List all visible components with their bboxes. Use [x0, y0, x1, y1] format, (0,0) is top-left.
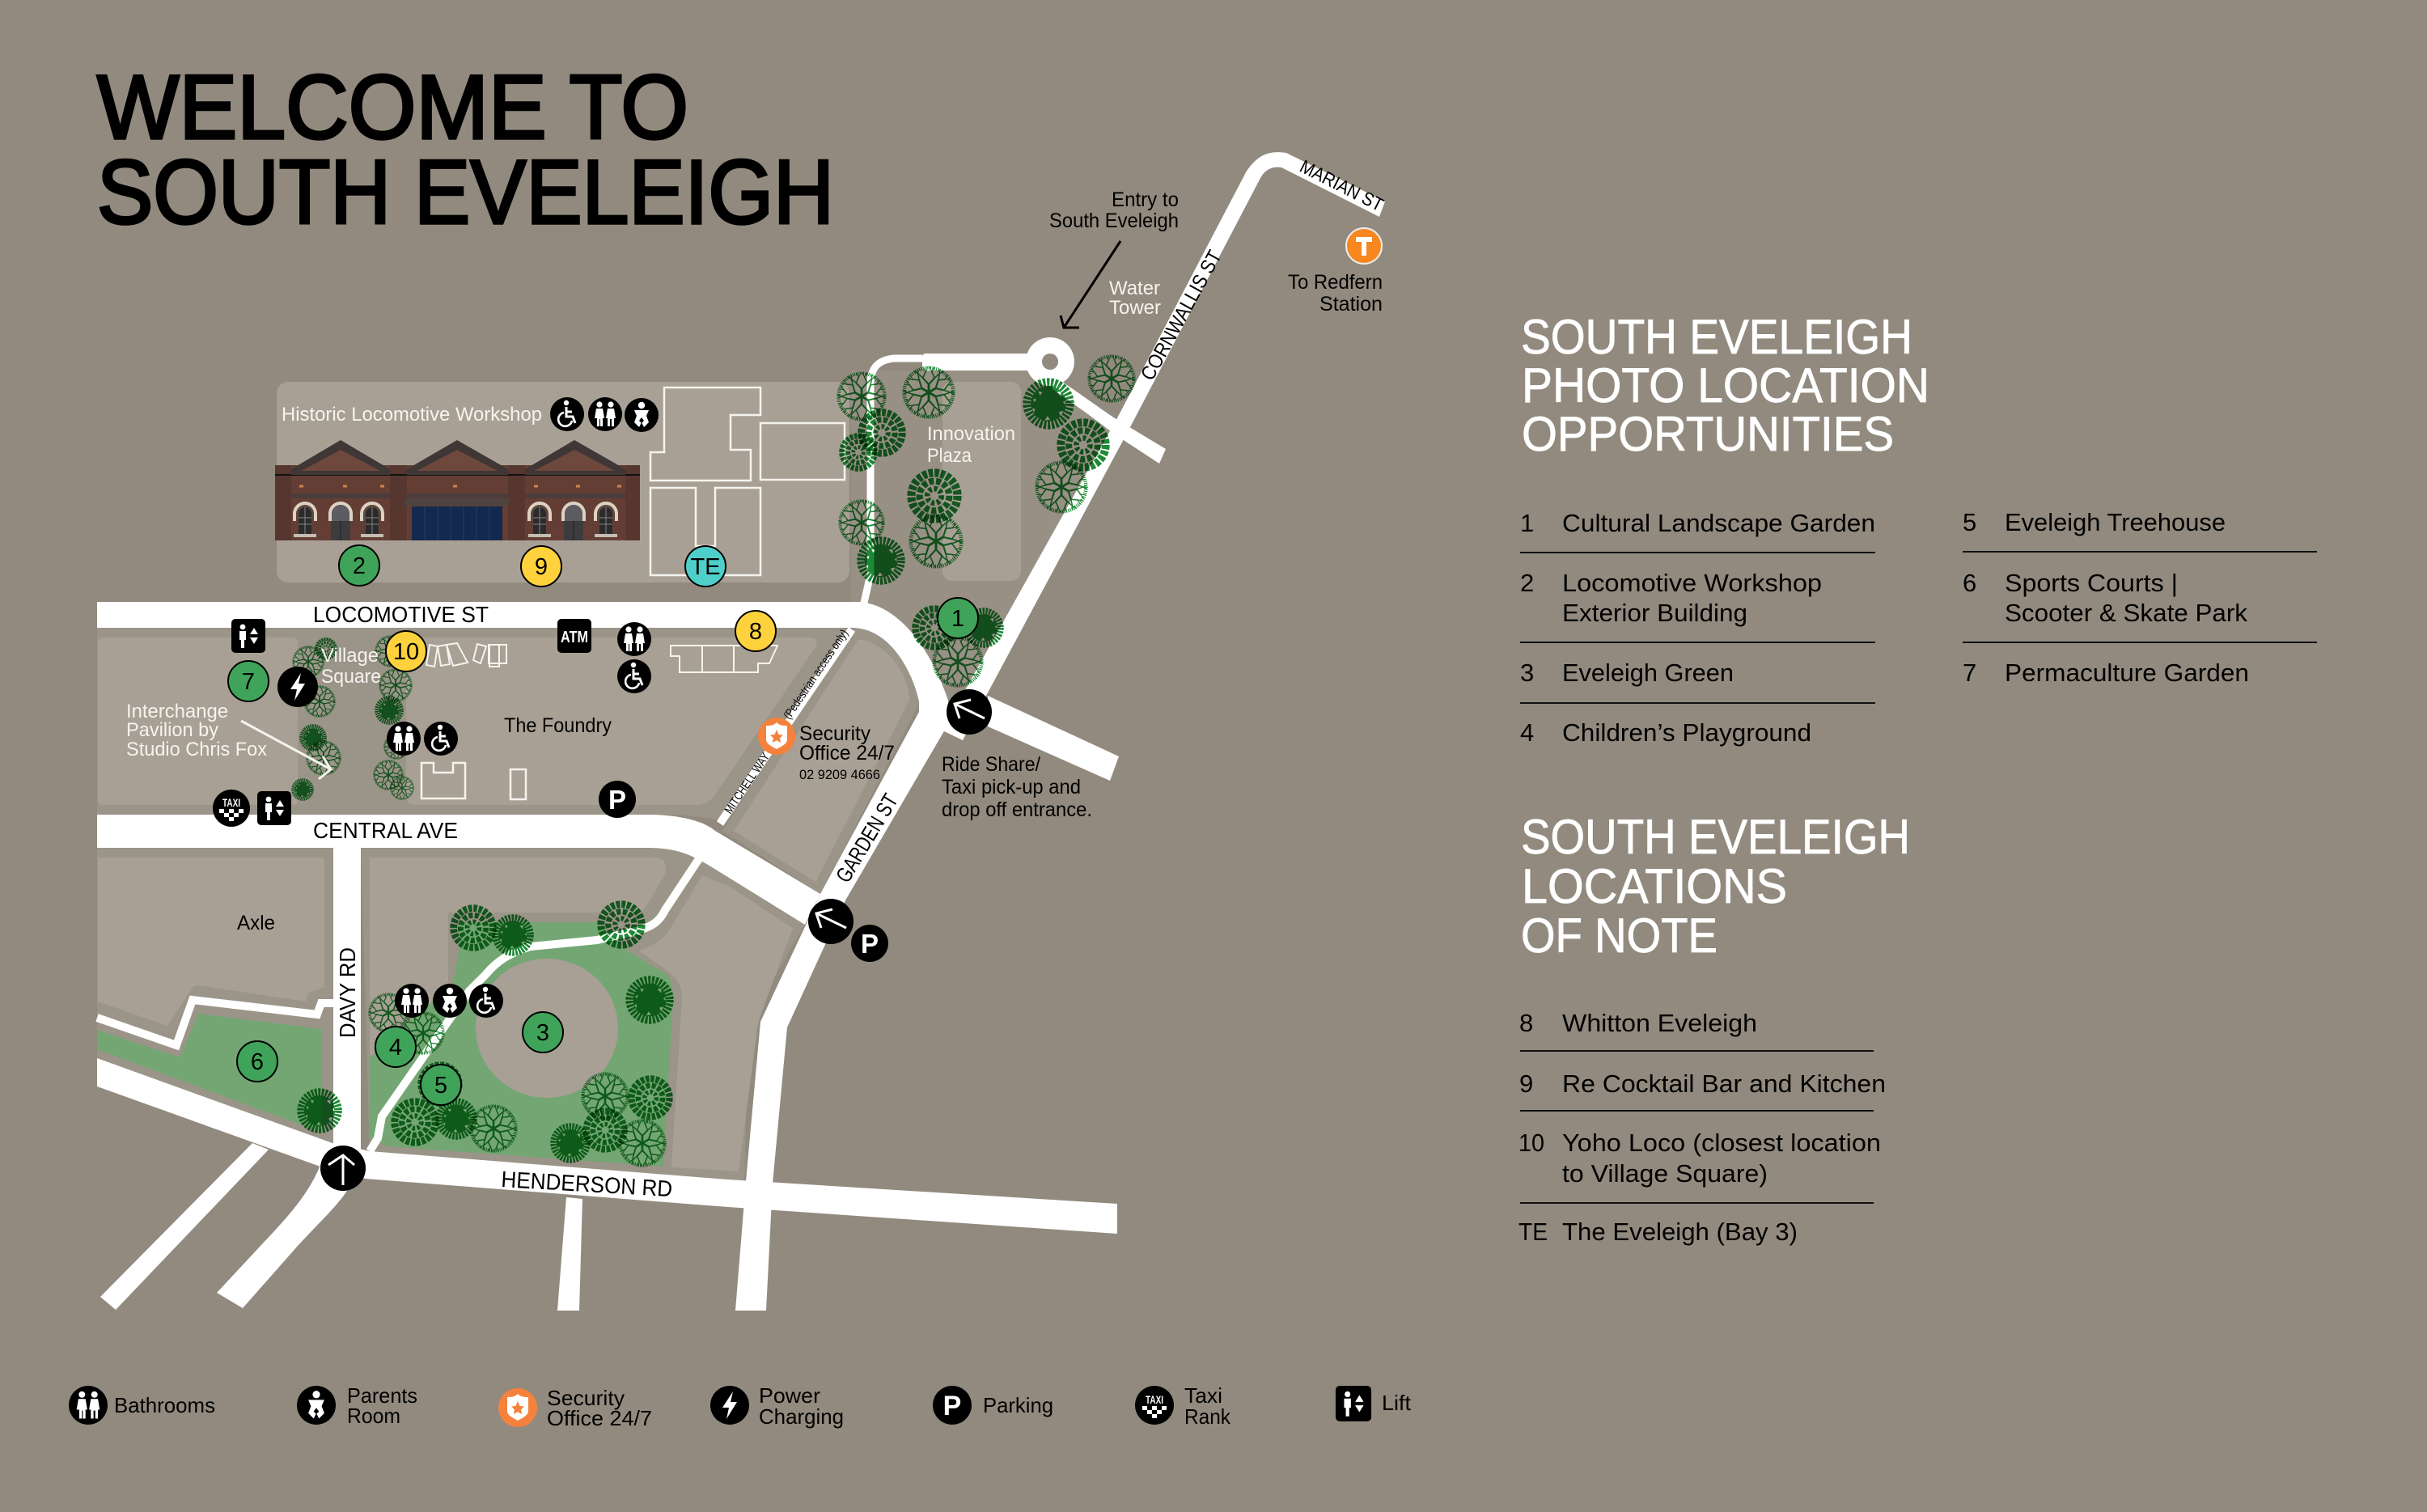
legend: parents room: Room [347, 1404, 400, 1428]
trees: Eveleigh Green [301, 904, 670, 1166]
legend: security office [498, 1386, 652, 1430]
legend: power charging [710, 1383, 844, 1429]
place names: Village [321, 645, 379, 667]
heading: photo locations: PHOTO LOCATION [1522, 358, 1929, 413]
list: locations of note: TE [1518, 1218, 1548, 1246]
facility icons: Village Square and Central Ave: P [608, 785, 626, 815]
arrow: interchange pavilion [241, 721, 331, 779]
light building blocks [98, 382, 1021, 1171]
numbered location pins: TE [690, 554, 721, 580]
place names: Plaza [927, 445, 972, 467]
numbered location pins: 1 [951, 606, 964, 632]
place names: South Eveleigh [1049, 210, 1179, 232]
train station icon [1346, 228, 1382, 264]
legend: power charging: Charging [759, 1404, 844, 1429]
place names: Historic Locomotive Workshop [282, 404, 542, 426]
arrow: entry to South Eveleigh [1061, 241, 1120, 328]
facility icons: Eveleigh Green [395, 984, 503, 1018]
workshop building illustration [275, 440, 640, 540]
facility icons: workshop [550, 397, 659, 432]
legend: security office: Office 24/7 [547, 1406, 652, 1430]
list: photo locations right column: Scooter & Skate Park [2005, 599, 2247, 627]
entry arrows and parking: P [861, 929, 879, 959]
place names: 02 9209 4666 [799, 767, 880, 782]
oval lawn [476, 959, 618, 1098]
place names: Taxi pick-up and [942, 776, 1081, 798]
place names: Interchange [126, 701, 228, 722]
list: photo locations right column: 6 [1963, 569, 1976, 597]
place names: Axle [237, 912, 275, 934]
place names: Pavilion by [126, 719, 218, 741]
legend: parents room: Parents [347, 1383, 417, 1408]
street names: CORNWALLIS ST [1137, 247, 1226, 384]
place names: Station [1319, 293, 1383, 316]
list: photo locations left column: 4 [1520, 718, 1534, 747]
legend: taxi rank: Taxi [1184, 1383, 1222, 1408]
street names: MARIAN ST [1297, 155, 1387, 215]
list: locations of note: 8 [1519, 1009, 1533, 1037]
list: photo locations left column: Eveleigh Green [1562, 659, 1734, 687]
heading: locations of note: SOUTH EVELEIGH [1521, 810, 1910, 864]
list: photo locations left column: Children’s Playground [1562, 718, 1811, 747]
heading: locations of note [1521, 810, 1910, 963]
legend: taxi rank [1135, 1383, 1231, 1429]
numbered location pins [228, 545, 978, 1105]
legend: bathrooms [69, 1386, 215, 1425]
list: photo locations left column: Cultural Landscape Garden [1562, 509, 1875, 537]
street names: MITCHELL WAY [722, 751, 773, 816]
legend: parking: P [943, 1391, 961, 1421]
legend: power charging: Power [759, 1383, 820, 1408]
facility icons: Village Square and Central Ave: TAXI [222, 796, 240, 809]
entry arrows and parking [320, 689, 992, 1191]
heading: locations of note: LOCATIONS [1522, 859, 1787, 913]
roundabout centre [1042, 354, 1058, 370]
list: locations of note [1518, 1009, 1886, 1246]
list: locations of note: Yoho Loco (closest location [1562, 1129, 1881, 1157]
list: photo locations right column: 5 [1963, 508, 1976, 536]
security office icon [758, 718, 795, 755]
list: photo locations right column: Eveleigh Treehouse [2005, 508, 2226, 536]
list: photo locations left column [1520, 509, 1875, 747]
list: locations of note: 9 [1519, 1069, 1533, 1098]
list: photo locations left column: Exterior Building [1562, 599, 1747, 627]
list: locations of note: 10 [1518, 1129, 1544, 1157]
numbered location pins: 8 [749, 619, 762, 645]
numbered location pins: 2 [353, 553, 366, 579]
heading: photo locations [1521, 310, 1929, 461]
street names: CENTRAL AVE [313, 818, 458, 843]
facility icons: Locomotive St: ATM [561, 629, 588, 646]
place names [126, 188, 1383, 934]
building outlines [421, 388, 845, 799]
place names: Water [1109, 277, 1160, 299]
list: photo locations left column: 1 [1520, 509, 1534, 537]
street names: GARDEN ST [831, 790, 903, 887]
ground zones [97, 371, 1115, 1181]
list: locations of note: Re Cocktail Bar and Kitchen [1562, 1069, 1886, 1098]
map [97, 152, 1387, 1311]
legend: lift [1336, 1386, 1412, 1421]
legend: lift: Lift [1382, 1391, 1412, 1415]
numbered location pins: 5 [434, 1073, 447, 1099]
legend: parking [933, 1386, 1053, 1425]
place names: The Foundry [504, 714, 612, 737]
list: photo locations right column: 7 [1963, 659, 1976, 687]
legend: bathrooms: Bathrooms [114, 1393, 215, 1417]
place names: Office 24/7 [799, 742, 895, 764]
street names: (Pedestrian access only) [781, 628, 851, 722]
list: photo locations right column: Sports Courts | [2005, 569, 2178, 597]
list: photo locations left column: 2 [1520, 569, 1534, 597]
legend: parking: Parking [983, 1393, 1053, 1417]
legend: taxi rank: Rank [1184, 1404, 1231, 1429]
title: WELCOME TO [97, 57, 688, 158]
place names: To Redfern [1288, 271, 1383, 294]
roads [97, 152, 1385, 1311]
heading: locations of note: OF NOTE [1521, 908, 1718, 963]
street names: HENDERSON RD [501, 1167, 673, 1201]
numbered location pins: 4 [389, 1035, 402, 1061]
place names: Square [321, 666, 381, 688]
place names: Studio Chris Fox [126, 739, 267, 760]
heading: photo locations: SOUTH EVELEIGH [1521, 310, 1912, 364]
facility icons: Village Square and Central Ave [213, 722, 636, 827]
street names [313, 155, 1387, 1201]
legend: taxi rank: TAXI [1146, 1393, 1163, 1406]
green spaces [97, 922, 673, 1167]
list: locations of note: to Village Square) [1562, 1159, 1768, 1188]
place names: Innovation [927, 423, 1015, 445]
place names: Tower [1109, 297, 1161, 319]
facility icons: Locomotive St [231, 619, 651, 707]
list: photo locations left column: Locomotive Workshop [1562, 569, 1822, 597]
place names: Ride Share/ [942, 753, 1040, 776]
trees: Village Square [291, 636, 415, 799]
numbered location pins: 6 [251, 1049, 264, 1075]
trees: Cornwallis entry and Innovation Plaza [835, 356, 1137, 686]
numbered location pins: 3 [536, 1020, 549, 1046]
legend: security office: Security [547, 1386, 625, 1410]
list: photo locations left column: 3 [1520, 659, 1534, 687]
heading: photo locations: OPPORTUNITIES [1522, 407, 1894, 461]
numbered location pins: 7 [242, 669, 255, 695]
place names: Security [799, 722, 870, 745]
footpaths [97, 358, 922, 1151]
list: photo locations right column: Permaculture Garden [2005, 659, 2249, 687]
place names: drop off entrance. [942, 798, 1092, 821]
list: photo locations right column [1963, 508, 2317, 687]
street names: DAVY RD [335, 947, 360, 1038]
numbered location pins: 9 [535, 554, 548, 580]
list: locations of note: The Eveleigh (Bay 3) [1562, 1218, 1798, 1246]
title: SOUTH EVELEIGH [97, 142, 834, 243]
street names: LOCOMOTIVE ST [313, 602, 489, 627]
title [97, 57, 834, 243]
legend: parents room [297, 1383, 417, 1428]
place names: Entry to [1112, 188, 1179, 211]
list: locations of note: Whitton Eveleigh [1562, 1009, 1757, 1037]
numbered location pins: 10 [393, 639, 419, 665]
legend [69, 1383, 1412, 1430]
